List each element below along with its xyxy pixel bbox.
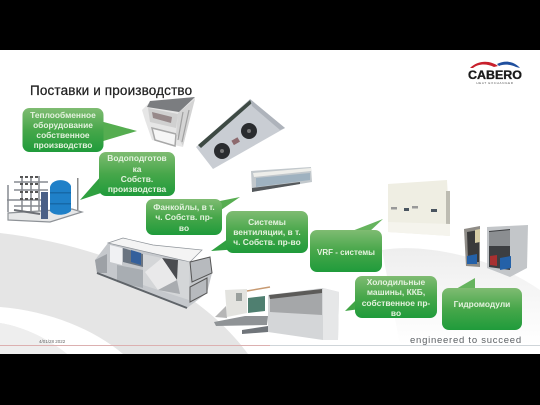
callout: heat exchange equipment: собственное	[36, 130, 90, 140]
callout: heat exchange equipment: производство	[34, 140, 92, 150]
callout: fan coils: ч. Собств. пр-	[155, 212, 213, 222]
callout: chillers: собственное пр-	[362, 298, 430, 308]
callout: chillers	[345, 276, 437, 318]
callout: fan coils	[146, 197, 240, 235]
callout: hydromodules: Гидромодули	[454, 299, 510, 309]
slide background	[0, 50, 540, 354]
callout: water treatment	[80, 152, 175, 200]
callout: heat exchange equipment: оборудование	[33, 120, 93, 130]
callout: ventilation systems: Системы	[248, 217, 286, 227]
callout: fan coils: во	[179, 223, 189, 233]
callout: chillers: Холодильные	[367, 277, 426, 287]
product: VRF unit	[388, 180, 450, 236]
callout: heat exchange equipment	[22, 108, 137, 152]
product: water treatment	[7, 176, 82, 222]
logo: CABERO: CABERO	[468, 70, 522, 82]
background swoosh	[0, 233, 540, 354]
product: dry cooler	[142, 97, 195, 147]
slogan: engineered to succeed	[410, 335, 522, 346]
product: ceiling air cooler	[196, 99, 285, 169]
callout: ventilation systems	[211, 211, 308, 253]
callout: fan coils: Фанкойлы, в т.	[153, 202, 215, 212]
callout: chillers: машины, ККБ,	[367, 287, 425, 297]
callout: water treatment: ка	[133, 164, 142, 174]
callout: water treatment: Собств.	[121, 174, 153, 184]
callout: chillers: во	[391, 308, 401, 318]
title: Поставки и производство	[30, 83, 192, 98]
callout: ventilation systems: вентиляции, в т.	[233, 227, 301, 237]
callout: heat exchange equipment: Теплообменное	[30, 110, 96, 120]
product: hydromodules	[464, 225, 528, 277]
logo: CABERO	[468, 62, 522, 85]
callout: hydromodules	[442, 278, 522, 330]
callout: water treatment: Водоподготов	[107, 153, 167, 163]
callout: ventilation systems: ч. Собств. пр-во	[233, 237, 301, 247]
product: chiller compressor	[214, 287, 270, 334]
logo: CABERO: HEAT EXCHANGER	[476, 81, 514, 85]
product: air handling unit	[95, 238, 212, 308]
callout: water treatment: производства	[108, 184, 166, 194]
product: air-cooled chiller	[268, 288, 339, 340]
footer rule	[0, 345, 270, 346]
product: fan coil	[251, 167, 312, 192]
callout: VRF systems: VRF - системы	[317, 248, 375, 257]
date: 4/01/28 2022	[39, 339, 66, 344]
callout: VRF systems	[310, 219, 383, 272]
